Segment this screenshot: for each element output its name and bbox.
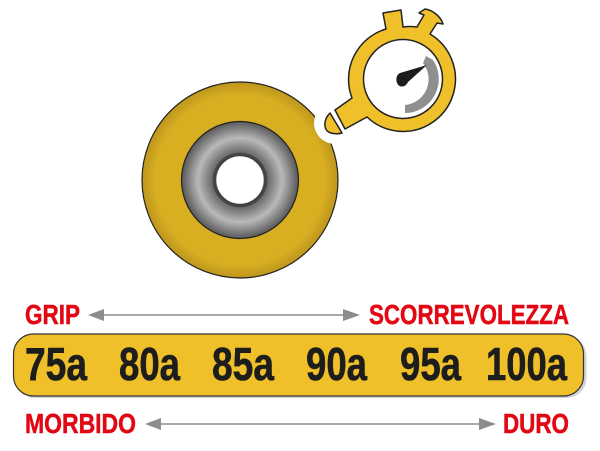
value: 100a: 100a — [486, 338, 567, 390]
value: 95a: 95a — [400, 338, 461, 390]
icon: durometer gauge — [325, 9, 455, 134]
label: GRIP: GRIP — [25, 299, 80, 330]
arrow: grip to scorrevolezza — [88, 309, 360, 321]
value: 75a: 75a — [25, 338, 87, 390]
label: DURO: DURO — [503, 408, 569, 439]
icon: wheel — [142, 82, 356, 278]
value: 85a: 85a — [212, 338, 274, 390]
value: 80a: 80a — [119, 338, 180, 390]
arrow: morbido to duro — [145, 418, 496, 430]
gauge needle — [396, 65, 427, 87]
label: MORBIDO: MORBIDO — [25, 408, 136, 439]
value: 90a: 90a — [306, 338, 367, 390]
gauge scale arc — [405, 56, 439, 113]
hardness scale bar — [14, 334, 586, 398]
